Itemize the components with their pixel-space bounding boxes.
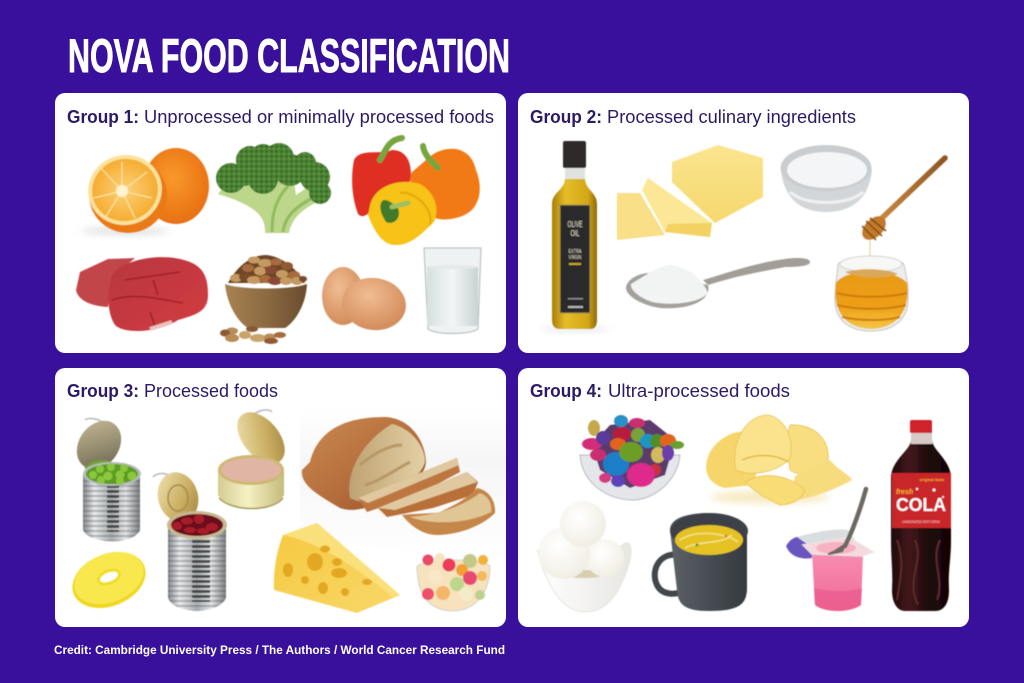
icon: olive oil bottle: EXTRA <box>568 249 582 255</box>
panel: group 1 <box>55 93 506 353</box>
icon: olive oil bottle: OLIVE <box>568 220 582 229</box>
icon: potato chips <box>706 415 852 505</box>
icon: broccoli <box>216 143 331 233</box>
icon: olive oil bottle <box>540 141 610 331</box>
icon: eggs <box>322 267 409 334</box>
soft backdrop behind bread <box>300 407 506 560</box>
heading: group 4: Ultra-processed foods <box>608 380 790 401</box>
icon: butter <box>617 145 763 240</box>
icon: bread loaf <box>302 417 495 535</box>
icon: bowl of jelly fruit <box>417 553 490 611</box>
heading: group 1: Unprocessed or minimally processed foods <box>144 106 494 127</box>
icon: olive oil bottle: VIRGIN <box>568 255 582 261</box>
icon: ice cream in white bowl <box>537 501 631 612</box>
icon: beef <box>76 257 208 331</box>
icon: cola bottle: CARBONATED SOFT DRINK <box>902 520 941 524</box>
heading: group 2: Group 2: <box>530 106 602 127</box>
icon: wedge of cheese <box>274 523 400 613</box>
credit line: Credit: Cambridge University Press / The Authors / World Cancer Research Fund <box>54 643 505 657</box>
heading: group 3: Group 3: <box>67 380 139 401</box>
icon: yogurt pot with spoon <box>786 489 873 611</box>
icon: cola bottle: fresh <box>896 489 913 496</box>
icon: pineapple ring <box>64 542 154 618</box>
title: NOVA FOOD CLASSIFICATION <box>68 29 510 82</box>
icon: honey dipper <box>858 158 945 264</box>
icon: olive oil bottle: OIL <box>570 229 580 238</box>
icon: orange <box>80 147 209 234</box>
icon: mug of noodle soup <box>655 513 748 611</box>
heading: group 4: Group 4: <box>530 380 602 401</box>
icon: cola bottle: original taste <box>920 477 945 482</box>
icon: nuts in bowl <box>220 255 307 344</box>
heading: group 4 <box>530 380 790 401</box>
icon: bowl of sugar <box>780 145 872 212</box>
panel: group 3 <box>55 368 506 627</box>
heading: group 1: Group 1: <box>67 106 139 127</box>
heading: group 3: Processed foods <box>144 380 278 401</box>
panel: group 2 <box>518 93 969 353</box>
panel: group 4 <box>518 368 969 627</box>
icon: can of peas <box>68 412 141 541</box>
icon: cola bottle: COLA <box>896 495 946 515</box>
icon: can of kidney beans <box>152 468 227 611</box>
icon: bowl of wrapped candies <box>580 415 684 500</box>
heading: group 3 <box>67 380 278 401</box>
icon: bell peppers <box>352 138 480 245</box>
icon: honey jar <box>835 256 908 331</box>
icon: can of tuna <box>218 403 294 508</box>
icon: glass of milk <box>424 248 481 334</box>
icon: cola bottle <box>891 420 951 611</box>
heading: group 2: Processed culinary ingredients <box>607 106 856 127</box>
icon: spoon of sugar <box>626 258 810 308</box>
